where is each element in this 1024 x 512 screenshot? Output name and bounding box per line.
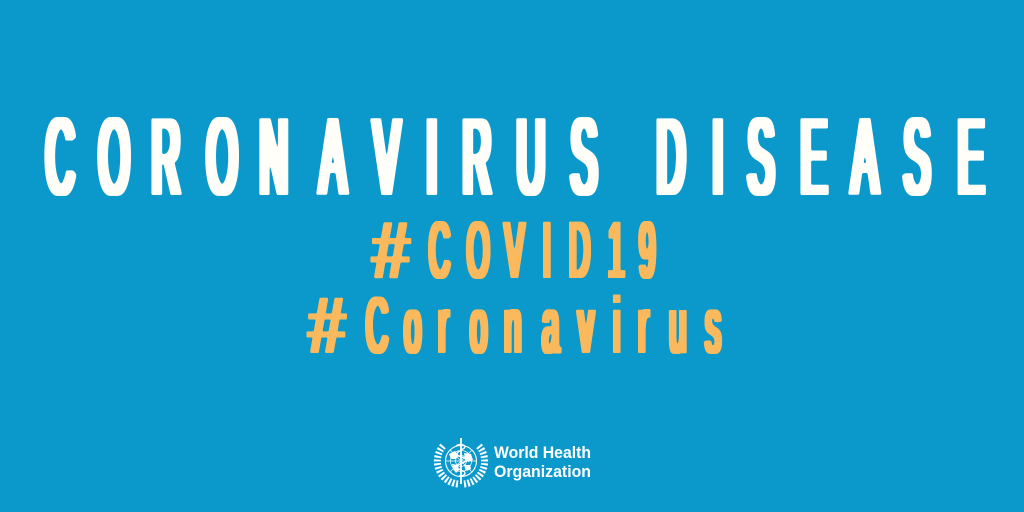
icon: WHO emblem xyxy=(437,438,485,484)
hashtag: #COVID19: # xyxy=(373,206,410,295)
hashtag: #Coronavirus: # xyxy=(309,283,345,370)
logo text: World Health xyxy=(494,443,591,462)
logo: World Health Organization xyxy=(437,438,591,484)
title: CORONAVIRUS DISEASE: CORONAVIRUS DISEASE xyxy=(46,97,984,218)
logo text xyxy=(494,443,591,481)
hashtag: #COVID19: COVID19 xyxy=(429,205,655,294)
logo text: Organization xyxy=(494,462,591,481)
hashtag: #Coronavirus: Coronavirus xyxy=(366,281,721,369)
